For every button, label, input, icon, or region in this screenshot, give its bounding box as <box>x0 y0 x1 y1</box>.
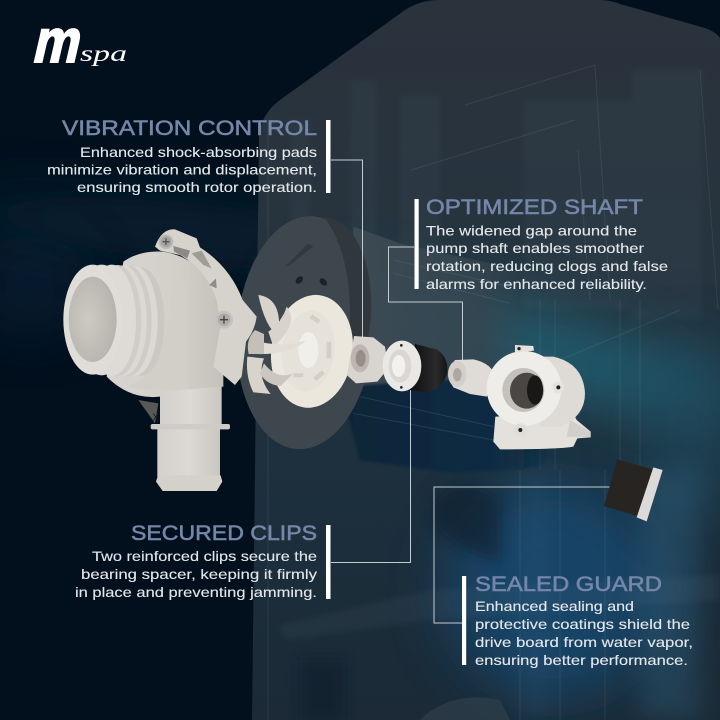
callout: optimized shaft: pump shaft enables smoother <box>426 240 644 256</box>
callout: sealed guard: protective coatings shield the <box>475 616 690 632</box>
sealed guard part <box>604 459 663 521</box>
outlet tube <box>151 387 230 491</box>
connector lines <box>331 160 610 623</box>
drive unit: dark disc and cylinder <box>229 212 560 473</box>
pump volute with threaded inlet <box>63 229 257 491</box>
rear pump housing <box>487 345 591 449</box>
logo: m <box>28 8 90 76</box>
logo: spa <box>80 41 127 66</box>
callout: sealed guard: Enhanced sealing and <box>475 598 634 614</box>
threaded inlet <box>63 265 164 376</box>
callout: sealed guard <box>462 572 693 668</box>
bearing parts <box>347 336 497 397</box>
ghost spa housing <box>252 0 720 720</box>
callout: vibration control: ensuring smooth rotor operation. <box>77 179 317 195</box>
callout: sealed guard: ensuring better performance. <box>475 652 688 668</box>
callout: optimized shaft: alarms for enhanced reliability. <box>426 276 647 292</box>
callout: sealed guard: SEALED GUARD <box>475 572 662 596</box>
callout: secured clips <box>75 521 330 600</box>
volute body <box>107 251 223 397</box>
callout: vibration control: minimize vibration and displacement, <box>47 162 317 178</box>
callout: optimized shaft <box>414 195 668 292</box>
callout: sealed guard: drive board from water vapor, <box>475 634 693 650</box>
callout: vibration control: VIBRATION CONTROL <box>62 116 317 140</box>
callout: secured clips: in place and preventing jamming. <box>75 584 317 600</box>
callout: optimized shaft: The widened gap around the <box>426 222 637 238</box>
callout: secured clips: bearing spacer, keeping it firmly <box>81 566 317 582</box>
callout: optimized shaft: OPTIMIZED SHAFT <box>426 195 643 219</box>
callout: optimized shaft: rotation, reducing clogs and false <box>426 258 668 274</box>
callout: vibration control: Enhanced shock-absorbing pads <box>80 144 317 160</box>
callout: vibration control <box>47 116 330 195</box>
impeller <box>247 290 360 413</box>
callout: secured clips: Two reinforced clips secure the <box>92 548 317 564</box>
callout: secured clips: SECURED CLIPS <box>131 521 317 545</box>
clamp bracket <box>155 229 257 385</box>
